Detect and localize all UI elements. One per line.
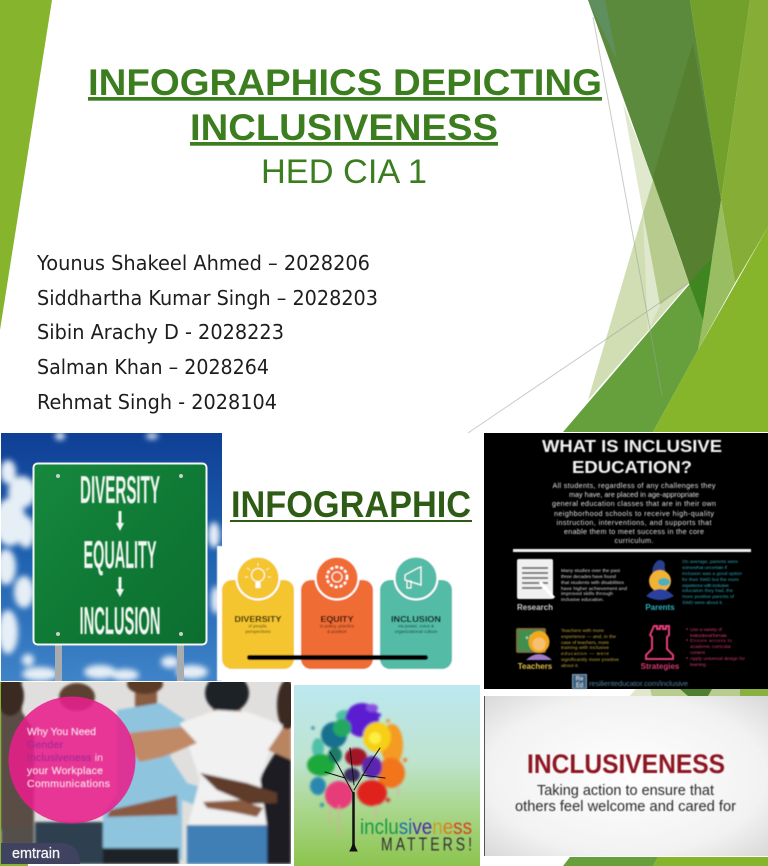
panel: inclusiveness definition: INCLUSIVENESS bbox=[527, 749, 725, 779]
card: inclusion bbox=[380, 556, 452, 669]
text: teachers finding: experience — and, in the bbox=[561, 634, 616, 640]
text: strategies list: content bbox=[690, 650, 706, 656]
icon: strategy rook bbox=[646, 626, 673, 659]
text: teachers finding: education — were bbox=[561, 651, 609, 657]
text: research finding: that students with disabilities bbox=[561, 580, 625, 586]
centre person bbox=[133, 690, 159, 708]
panel: inclusiveness definition: others feel welcome and cared for bbox=[515, 798, 736, 815]
emtrain logo tab bbox=[1, 843, 80, 864]
image: people with arms around each other bbox=[0, 673, 297, 864]
image: diversity equality inclusion road sign bbox=[0, 432, 222, 681]
title: HED CIA 1 bbox=[261, 153, 427, 191]
intro paragraph: curriculum. bbox=[614, 536, 654, 545]
panel: inclusiveness definition: Taking action to ensure that bbox=[537, 782, 715, 799]
card: diversity: of people, bbox=[248, 624, 268, 628]
icon: teacher at chalkboard: +2 bbox=[525, 635, 533, 642]
text: strategies list: instructional formats bbox=[690, 633, 728, 639]
card: inclusion: INCLUSION bbox=[391, 614, 441, 624]
pink circle callout bbox=[8, 696, 136, 824]
text: parents finding: somewhat uncertain if bbox=[682, 565, 728, 571]
background shapes: green strip between panels bbox=[630, 689, 768, 696]
text: strategies list: Apply universal design for bbox=[690, 656, 745, 662]
intro paragraph: instruction, interventions, and supports that bbox=[556, 518, 712, 527]
card: diversity bbox=[222, 556, 294, 669]
text: parents finding: SWD were about it. bbox=[682, 600, 723, 606]
text: teachers finding: Teachers with more bbox=[561, 628, 604, 634]
intro paragraph: general education classes that are in their own bbox=[552, 499, 716, 508]
footer: resilient educator source: Re bbox=[576, 676, 584, 682]
text: teachers finding: case of teachers, more bbox=[561, 640, 609, 646]
right people bbox=[275, 682, 291, 731]
left people bbox=[0, 680, 34, 830]
intro paragraph: neighborhood schools to receive high-quality bbox=[554, 509, 714, 518]
text: strategies list: Ensure access to bbox=[690, 638, 732, 644]
text: parents finding: more positive parents of bbox=[682, 594, 735, 600]
text: parents finding: experience with inclusive bbox=[682, 583, 729, 589]
text: research finding: Many studies over the past bbox=[561, 568, 621, 574]
tree trunk and branches bbox=[325, 748, 385, 851]
title: INCLUSIVENESS bbox=[190, 107, 498, 148]
label: teachers: Teachers bbox=[518, 662, 553, 671]
text: teachers finding: about it. bbox=[561, 663, 579, 669]
text: teachers finding: training with inclusive bbox=[561, 645, 609, 651]
team member names bbox=[36, 251, 378, 414]
icon: research document bbox=[517, 559, 554, 599]
text: teachers finding bbox=[561, 628, 619, 669]
panel: diversity equity inclusion cards bbox=[217, 546, 480, 681]
card: inclusion: via power, voice & bbox=[398, 624, 434, 628]
pink circle callout: Communications bbox=[27, 778, 110, 790]
text: teachers finding: significantly more positive bbox=[561, 657, 619, 663]
panel: what is inclusive education bbox=[484, 433, 768, 689]
text: strategies list bbox=[686, 627, 745, 668]
intro paragraph: may have, are placed in age-appropriate bbox=[569, 490, 699, 499]
text: research finding bbox=[561, 568, 627, 603]
background shape: left green wedge bbox=[0, 0, 52, 330]
emtrain logo tab: emtrain bbox=[12, 845, 60, 862]
label: inclusiveness matters: MATTERS! bbox=[381, 833, 472, 855]
card: inclusion: organizational culture bbox=[395, 629, 438, 634]
intro paragraph: All students, regardless of any challenges they bbox=[552, 481, 716, 490]
intro paragraph: enable them to meet success in the core bbox=[564, 527, 704, 536]
title bbox=[88, 62, 602, 191]
footer: resilient educator source: resilienteducator.com/inclusive bbox=[589, 679, 688, 688]
panel: inclusiveness definition bbox=[484, 696, 768, 856]
text: parents finding: for their SWD but the more bbox=[682, 577, 739, 583]
team member names: Siddhartha Kumar Singh – 2028203 bbox=[37, 286, 378, 310]
arms bbox=[128, 727, 197, 762]
text: parents finding: inclusion was a good option bbox=[682, 571, 742, 577]
text: parents finding bbox=[682, 559, 742, 606]
label: parents: Parents bbox=[645, 603, 675, 612]
pink circle callout: Gender bbox=[27, 739, 64, 751]
team member names: Rehmat Singh - 2028104 bbox=[37, 390, 277, 414]
team member names: Younus Shakeel Ahmed – 2028206 bbox=[36, 251, 370, 275]
heading: EDUCATION? bbox=[572, 457, 692, 477]
card: diversity: DIVERSITY bbox=[234, 614, 282, 624]
text: strategies list: learning bbox=[690, 662, 706, 668]
team member names: Salman Khan – 2028264 bbox=[37, 355, 269, 379]
card: equity bbox=[301, 556, 373, 669]
text: strategies list: Use a variety of bbox=[690, 627, 723, 633]
card: diversity: perspectives bbox=[245, 629, 271, 634]
pink circle callout: Inclusiveness in bbox=[27, 752, 103, 764]
image: diversity equality inclusion road sign: INCLUSION bbox=[80, 600, 160, 643]
image: diversity equality inclusion road sign: EQUALITY bbox=[84, 534, 156, 577]
heading: INFOGRAPHIC: INFOGRAPHIC bbox=[231, 484, 471, 525]
background shapes: right green facets bbox=[563, 0, 768, 432]
background shapes: green strip at bottom bbox=[0, 682, 768, 866]
intro paragraph bbox=[552, 481, 716, 545]
tree paint splashes bbox=[307, 703, 407, 835]
text: parents finding: On average, parents were bbox=[682, 559, 738, 565]
text: strategies list: academic curricular bbox=[690, 644, 731, 650]
team member names: Sibin Arachy D - 2028223 bbox=[37, 320, 284, 344]
image: diversity equality inclusion road sign: DIVERSITY bbox=[80, 469, 160, 512]
icon: parent and child bbox=[646, 560, 674, 600]
title: INFOGRAPHICS DEPICTING bbox=[88, 62, 602, 103]
label: inclusiveness matters bbox=[360, 818, 472, 852]
heading: WHAT IS INCLUSIVE bbox=[542, 436, 722, 456]
card: equity: & position bbox=[327, 629, 347, 634]
decorative thin lines bbox=[468, 17, 689, 433]
text: research finding: three decades have found bbox=[561, 574, 616, 580]
heading bbox=[542, 436, 722, 477]
text: parents finding: education they had, the bbox=[682, 588, 733, 594]
label: research: Research bbox=[517, 603, 553, 612]
image: inclusiveness matters tree bbox=[294, 685, 480, 866]
footer: resilient educator source bbox=[572, 674, 688, 689]
card: equity: EQUITY bbox=[320, 614, 354, 624]
text: research finding: have higher achievement and bbox=[561, 586, 627, 592]
card: equity: in policy, practice bbox=[320, 624, 355, 628]
text: research finding: inclusive education. bbox=[561, 597, 604, 603]
footer: resilient educator source: Ed bbox=[576, 683, 583, 689]
label: inclusiveness matters: inclusiveness bbox=[360, 816, 472, 839]
text: research finding: improved skills through bbox=[561, 591, 613, 597]
label: strategies: Strategies bbox=[641, 662, 680, 671]
pink circle callout: Why You Need bbox=[27, 726, 96, 738]
icon: teacher at chalkboard bbox=[516, 628, 552, 660]
pink circle callout: your Workplace bbox=[27, 765, 103, 777]
